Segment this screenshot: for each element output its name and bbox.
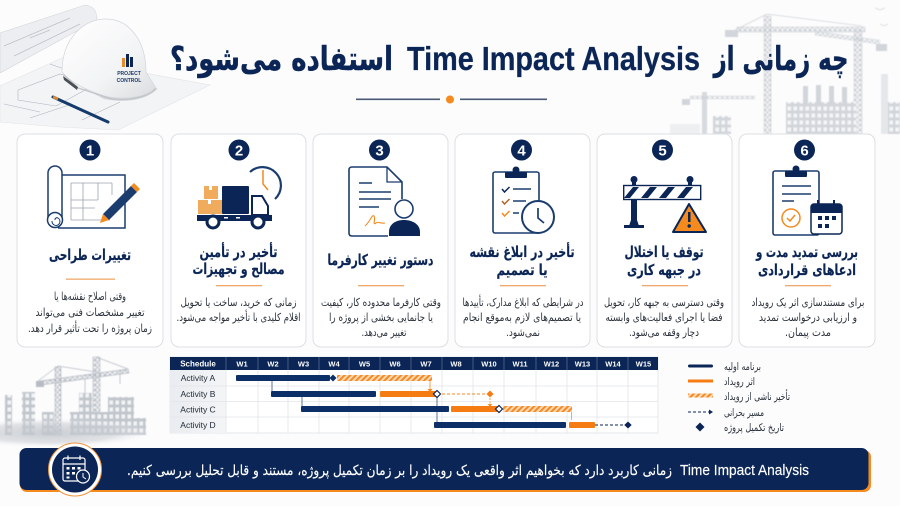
legend: baseline: برنامه اولیه <box>724 361 761 373</box>
body text: تغییر می‌دهد. <box>362 326 406 339</box>
illustration: cranes and skyline top right <box>670 8 900 134</box>
number badge 4 <box>511 140 532 160</box>
number badge 5: 5 <box>658 142 667 160</box>
gantt row labels: Activity B <box>181 389 216 399</box>
number badge 1 <box>80 140 100 160</box>
card title: تغییرات طراحی <box>49 246 131 264</box>
title <box>170 39 848 79</box>
card title: مصالح و تجهیزات <box>192 260 284 278</box>
number badge 5 <box>652 140 673 160</box>
gantt header: W13 <box>575 360 590 368</box>
divider <box>500 285 546 286</box>
gantt header: W1 <box>236 360 248 368</box>
panel 4: late issue of drawings <box>455 134 590 347</box>
banner text: Time Impact Analysis <box>680 462 809 479</box>
helmet <box>64 78 158 101</box>
number badge 1: 1 <box>86 142 94 160</box>
panel 6: extension of time claims <box>739 134 875 347</box>
gantt header: W3 <box>298 360 309 368</box>
number badge 2: 2 <box>235 142 243 160</box>
gantt chart <box>170 357 658 433</box>
divider <box>66 278 115 280</box>
divider <box>358 285 404 286</box>
icon: blueprint and pencil <box>48 166 140 228</box>
card title: تأخیر در تأمین <box>200 242 278 261</box>
panel 3: employer change order <box>313 134 448 347</box>
activity C bars <box>301 406 572 420</box>
body text: فضا یا اجرای فعالیت‌های وابسته <box>606 311 722 324</box>
pencil <box>53 97 108 122</box>
number badge 2 <box>228 140 250 160</box>
body text <box>604 296 724 339</box>
card title <box>470 242 574 279</box>
title: Time Impact Analysis <box>407 40 700 77</box>
body text <box>321 296 441 339</box>
card title <box>624 243 704 279</box>
body text: وقتی اصلاح نقشه‌ها یا <box>54 290 126 303</box>
body text <box>462 294 584 339</box>
icon: truck and clock <box>197 167 281 228</box>
body text: اقلام کلیدی با تأخیر مواجه می‌شود. <box>176 309 300 324</box>
body text: وقتی کارفرما محدوده کار، کیفیت <box>321 296 441 309</box>
card title: ادعاهای قراردادی <box>758 261 856 279</box>
activity B bars <box>271 390 494 407</box>
card title <box>755 243 858 279</box>
gantt header: Schedule <box>180 360 216 368</box>
card title <box>192 242 284 278</box>
card title: یا تصمیم <box>496 261 548 279</box>
gantt row labels: Activity A <box>181 373 216 383</box>
panel 1: design changes <box>17 134 163 347</box>
icon: clipboard and calendar <box>773 166 842 235</box>
card title: توقف یا اختلال <box>624 243 704 261</box>
body text: برای مستندسازی اثر یک رویداد <box>752 296 864 309</box>
gantt header: W2 <box>267 360 279 368</box>
icon: clipboard with clock <box>493 166 554 233</box>
card title: در جبهه کاری <box>627 261 701 279</box>
legend <box>688 361 790 434</box>
title: استفاده می‌شود؟ <box>170 39 393 79</box>
gantt header: W7 <box>420 360 432 368</box>
legend: completion date: تاریخ تکمیل پروژه <box>724 422 784 434</box>
helmet logo: CONTROL <box>117 78 141 84</box>
body text: نمی‌شود. <box>506 326 540 339</box>
icon: document and person <box>349 167 420 236</box>
body text <box>752 296 864 339</box>
helmet logo: PROJECT <box>117 71 141 77</box>
activity D bars <box>434 422 632 428</box>
legend: delay from event: تأخیر ناشی از رویداد <box>724 389 790 403</box>
panel 5: work front disruption <box>597 134 732 347</box>
body text <box>28 290 152 335</box>
banner text: زمانی کاربرد دارد که بخواهیم اثر واقعی یک رویداد را بر زمان تکمیل پروژه، مستند و قابل تحلیل بررسی کنیم. <box>127 463 672 479</box>
gantt row labels: Activity D <box>180 420 216 430</box>
activity A bars <box>236 374 432 392</box>
gantt header: W6 <box>389 360 401 368</box>
body text: زمانی که خرید، ساخت یا تحویل <box>180 296 296 309</box>
gantt connectors <box>272 380 437 423</box>
icon: barrier and warning <box>624 176 706 232</box>
gantt header: W8 <box>450 360 462 368</box>
gantt header: W11 <box>512 360 528 368</box>
body text: مدت پیمان. <box>785 326 831 339</box>
gantt row labels: Activity C <box>180 404 216 414</box>
gantt header: W4 <box>328 360 340 368</box>
number badge 3: 3 <box>375 142 384 160</box>
card title: دستور تغییر کارفرما <box>328 251 434 269</box>
gantt header: W10 <box>481 360 497 368</box>
number badge 4: 4 <box>517 142 526 160</box>
gantt header: W14 <box>605 360 622 368</box>
gantt header <box>170 357 658 370</box>
number badge 6 <box>794 140 815 160</box>
card title: تأخیر در ابلاغ نقشه <box>470 242 574 261</box>
number badge 3 <box>369 140 390 160</box>
helmet logo <box>117 54 141 84</box>
body text: در شرایطی که ابلاغ مدارک، تأییدها <box>462 294 584 309</box>
divider <box>642 285 688 286</box>
bottom banner <box>20 443 871 496</box>
body text: یا جانمایی بخشی از پروژه را <box>329 311 433 324</box>
number badge 6: 6 <box>800 142 809 160</box>
body text: زمان پروژه را تحت تأثیر قرار دهد. <box>28 320 152 335</box>
body text <box>176 296 300 324</box>
gantt header: W12 <box>544 360 559 368</box>
illustration: cranes and skyline bottom left <box>0 357 155 448</box>
body text: تغییر مشخصات فنی می‌تواند <box>36 306 144 319</box>
divider <box>785 285 831 286</box>
legend: event impact: اثر رویداد <box>724 376 755 388</box>
gantt header: W15 <box>636 360 651 368</box>
panel 2: supply delay <box>171 134 306 347</box>
body text: دچار وقفه می‌شود. <box>629 326 699 339</box>
body text: و ارزیابی درخواست تمدید <box>759 311 857 324</box>
title divider with orange dot <box>356 96 547 104</box>
blueprint roll <box>0 5 97 73</box>
divider <box>216 285 262 286</box>
blueprint sheet <box>0 58 210 130</box>
body text: یا تصمیم‌های لازم به‌موقع انجام <box>463 311 581 324</box>
illustration: blueprints, helmet and pencil <box>0 5 210 130</box>
legend: critical path: مسیر بحرانی <box>724 407 764 419</box>
gantt header: W5 <box>359 360 370 368</box>
icon: calendar clock badge <box>48 443 102 496</box>
gantt row labels <box>180 373 216 430</box>
body text: وقتی دسترسی به جبهه کار، تحویل <box>604 296 724 309</box>
